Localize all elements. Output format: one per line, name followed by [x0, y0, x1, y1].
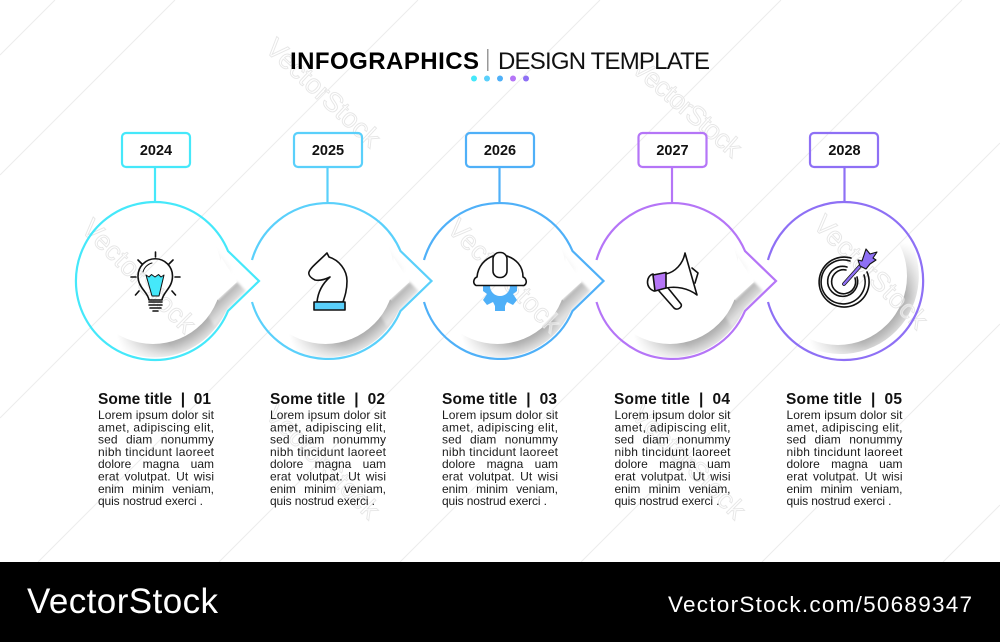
- step 2 text: sed diam nonummy: [270, 433, 386, 447]
- step 2 outline with year connector: [252, 133, 432, 359]
- watermark text: VectorStock: [442, 213, 568, 339]
- step 4 outline with year connector: [596, 133, 776, 359]
- step 3 text: dolore magna uam: [442, 457, 558, 471]
- step 2 text: quis nostrud exerci .: [270, 494, 375, 508]
- icon: chess knight: [309, 253, 347, 310]
- year 2027: 2027: [656, 143, 689, 159]
- step 3 text: [442, 391, 559, 508]
- watermark text: VectorStock: [626, 399, 752, 525]
- step 1 text: erat volutpat. Ut wisi: [98, 470, 214, 484]
- step 5 text: sed diam nonummy: [786, 433, 902, 447]
- step 5 text: dolore magna uam: [786, 457, 902, 471]
- step 3 text: erat volutpat. Ut wisi: [442, 470, 558, 484]
- footer bar: [0, 562, 1000, 642]
- step 1 text: amet, adipiscing elit,: [98, 420, 214, 434]
- step 5 text: Lorem ipsum dolor sit: [786, 408, 903, 422]
- step 4 text: sed diam nonummy: [614, 433, 730, 447]
- step 5 text: nibh tincidunt laoreet: [786, 445, 903, 459]
- step 1 text: Some title | 01: [98, 391, 211, 408]
- title dots: [471, 76, 529, 82]
- watermark text: VectorStock: [260, 399, 386, 525]
- watermark text: VectorStock: [626, 52, 748, 163]
- step 1 text: sed diam nonummy: [98, 433, 214, 447]
- step 5 text: [786, 391, 903, 508]
- step 4 text: Some title | 04: [614, 391, 730, 408]
- title: DESIGN TEMPLATE: [498, 48, 710, 75]
- step 2 text: erat volutpat. Ut wisi: [270, 470, 386, 484]
- icon: light bulb: [131, 252, 180, 311]
- step 2 text: Lorem ipsum dolor sit: [270, 408, 387, 422]
- footer bar: VectorStock.com/50689347: [668, 592, 972, 617]
- step 1 text: [98, 391, 215, 508]
- year 2028: 2028: [828, 143, 861, 159]
- step 2 text: dolore magna uam: [270, 457, 386, 471]
- step 4 text: enim minim veniam,: [614, 482, 730, 496]
- watermark text: [76, 32, 934, 525]
- step 5 text: erat volutpat. Ut wisi: [786, 470, 902, 484]
- step 4 text: [614, 391, 731, 508]
- step 2 text: enim minim veniam,: [270, 482, 386, 496]
- watermark text: VectorStock: [76, 213, 202, 339]
- step 4 text: erat volutpat. Ut wisi: [614, 470, 730, 484]
- step 2 text: nibh tincidunt laoreet: [270, 445, 387, 459]
- step 5 text: amet, adipiscing elit,: [786, 420, 902, 434]
- step 1 shadow: [122, 282, 246, 358]
- step 1 text: nibh tincidunt laoreet: [98, 445, 215, 459]
- year 2026: 2026: [484, 143, 516, 159]
- step 4 text: dolore magna uam: [614, 457, 730, 471]
- step 1 outline with year connector: [76, 133, 259, 360]
- step 3 shadow: [466, 282, 590, 358]
- step 3 outline with year connector: [424, 133, 604, 359]
- title: [290, 48, 710, 75]
- step 1 text: quis nostrud exerci .: [98, 494, 203, 508]
- step 3 text: enim minim veniam,: [442, 482, 558, 496]
- watermark text: VectorStock: [260, 32, 387, 154]
- year 2025: 2025: [312, 143, 344, 159]
- step 4 text: quis nostrud exerci .: [614, 494, 720, 508]
- step 3 text: amet, adipiscing elit,: [442, 420, 558, 434]
- step 2 text: Some title | 02: [270, 391, 385, 408]
- step 4 text: nibh tincidunt laoreet: [614, 445, 731, 459]
- step 1 text: Lorem ipsum dolor sit: [98, 408, 215, 422]
- step 4 text: Lorem ipsum dolor sit: [614, 408, 731, 422]
- step 1 text: dolore magna uam: [98, 457, 214, 471]
- icon: target with arrow: [819, 249, 877, 307]
- step 5 text: enim minim veniam,: [786, 482, 902, 496]
- step 3 text: sed diam nonummy: [442, 433, 558, 447]
- step 4 shadow: [639, 282, 763, 358]
- title: INFOGRAPHICS: [290, 48, 479, 75]
- footer bar: VectorStock: [27, 582, 218, 621]
- step 2 shadow: [294, 282, 418, 358]
- step 5 text: quis nostrud exerci .: [786, 494, 892, 508]
- watermark text: VectorStock: [808, 209, 934, 335]
- step 3 text: quis nostrud exerci .: [442, 494, 547, 508]
- step 5 outline with year connector: [768, 133, 923, 360]
- step 2 text: [270, 391, 387, 508]
- step 1 text: enim minim veniam,: [98, 482, 214, 496]
- year 2024: 2024: [140, 143, 172, 159]
- icon: helmet and gear: [474, 252, 526, 311]
- step 3 text: Some title | 03: [442, 391, 557, 408]
- step 3 text: nibh tincidunt laoreet: [442, 445, 559, 459]
- step 3 text: Lorem ipsum dolor sit: [442, 408, 559, 422]
- icon: megaphone: [648, 253, 698, 309]
- step 5 shadow: [815, 248, 919, 354]
- step 4 text: amet, adipiscing elit,: [614, 420, 730, 434]
- step 2 text: amet, adipiscing elit,: [270, 420, 386, 434]
- step 5 text: Some title | 05: [786, 391, 902, 408]
